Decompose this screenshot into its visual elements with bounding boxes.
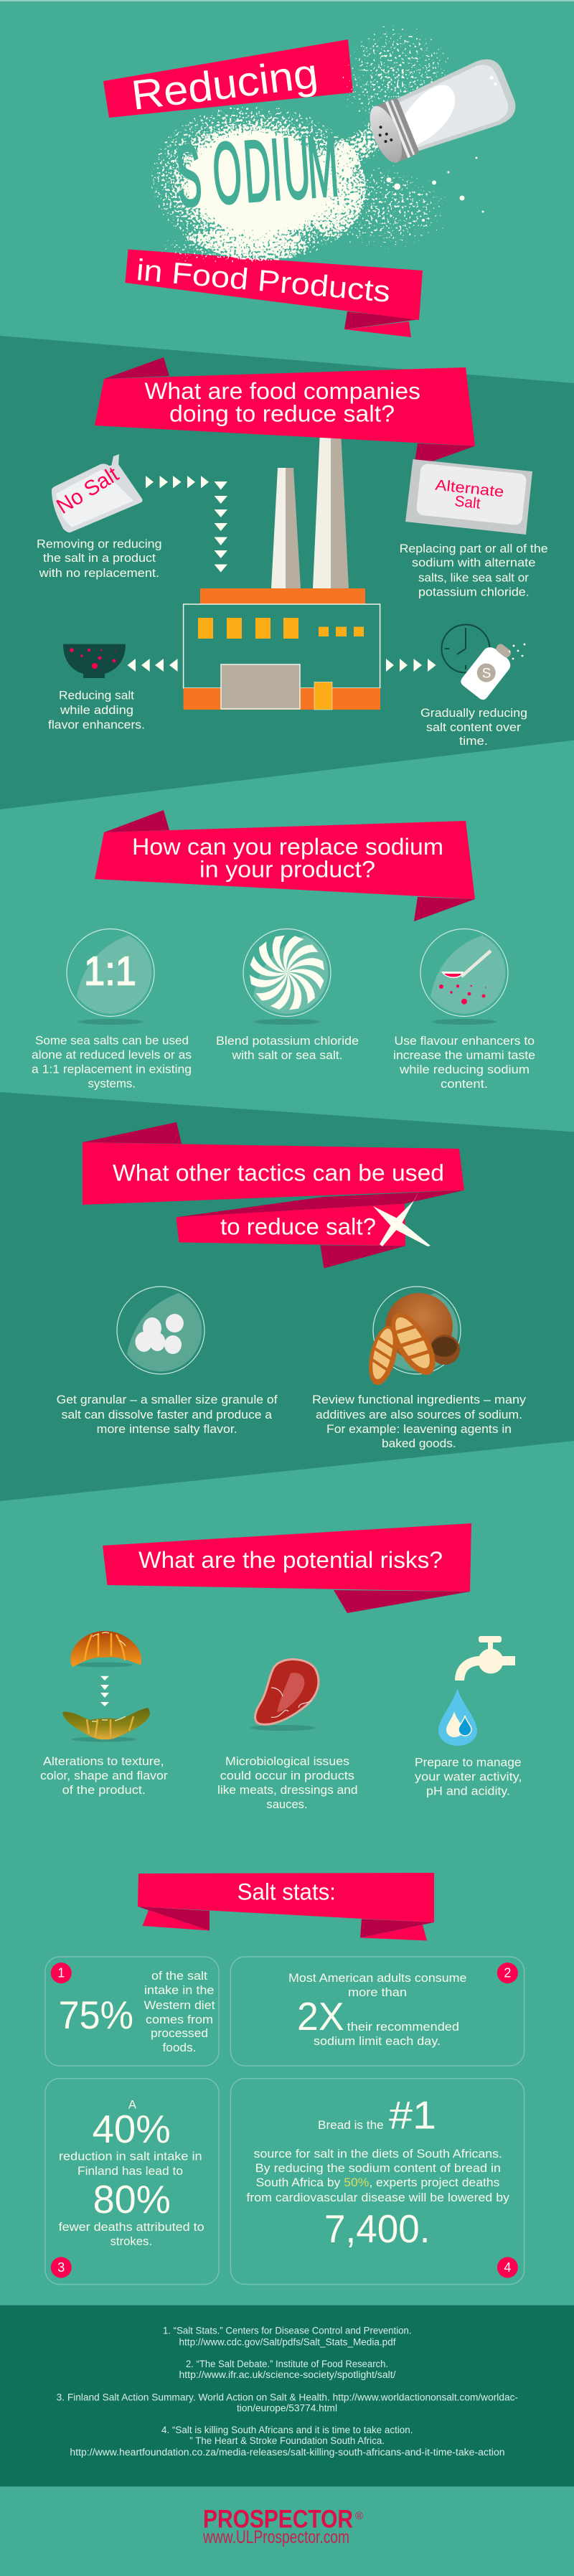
banner heading: how can you replace sodium	[95, 810, 475, 921]
card 2: 2X: their recommended	[347, 2020, 459, 2034]
text: microbiological issues: Microbiological issues	[225, 1754, 349, 1768]
reference 2	[179, 2359, 396, 2380]
icon: bread circle	[364, 1287, 461, 1388]
text: review functional ingredients: additives are also sources of sodium.	[316, 1408, 522, 1421]
banner heading: what other tactics: What other tactics can be used	[113, 1160, 444, 1185]
reference 4: http://www.heartfoundation.co.za/media-releases/salt-killing-south-africans-and-it-time-take-action	[70, 2447, 505, 2458]
card 3: 40 percent and 80 percent: fewer deaths attributed to	[59, 2220, 204, 2234]
reference 2: 2. “The Salt Debate.” Institute of Food Research.	[186, 2359, 388, 2369]
reference 4: 4. “Salt is killing South Africans and it is time to take action.	[161, 2425, 413, 2435]
card 2: 2X: Most American adults consume	[288, 1971, 466, 1985]
card 3: 40 percent and 80 percent	[45, 2079, 219, 2285]
icon: salt granules circle	[117, 1287, 204, 1374]
arrows: factory to bowl	[128, 659, 178, 672]
text: blend potassium chloride: with salt or sea salt.	[231, 1048, 343, 1062]
panel: potential risks	[40, 1523, 522, 1811]
text: microbiological issues	[217, 1754, 357, 1811]
card 4: bread number 1: 7,400.	[324, 2206, 430, 2251]
icon: salt shaker	[362, 54, 521, 170]
card 3: 40 percent and 80 percent: Finland has lead to	[77, 2164, 183, 2178]
card 3: 40 percent and 80 percent: 3	[57, 2260, 65, 2275]
card 1: 75 percent	[45, 1957, 219, 2066]
banner heading: salt stats: Salt stats:	[237, 1879, 336, 1904]
salt splash large grains	[293, 156, 484, 243]
icon: bowl with flavor enhancers	[63, 644, 126, 678]
card 2: 2X: sodium limit each day.	[314, 2034, 441, 2048]
text: some sea salts: a 1:1 replacement in existing	[32, 1063, 192, 1076]
banner heading: what other tactics: to reduce salt?	[220, 1213, 376, 1239]
text: some sea salts: systems.	[88, 1077, 136, 1091]
card 3: 40 percent and 80 percent: 80%	[93, 2177, 171, 2222]
panel: references	[0, 2305, 574, 2486]
text: alterations to texture: of the product.	[62, 1783, 146, 1797]
text: reducing salt while adding: Reducing salt	[59, 688, 134, 702]
icon: clock and salt shaker	[442, 624, 525, 702]
icon: chalk X of salt	[373, 1191, 430, 1246]
text: alterations to texture: Alterations to texture,	[43, 1754, 164, 1768]
banner: in Food Products	[125, 250, 423, 337]
text: review functional ingredients: Review functional ingredients – many	[312, 1393, 527, 1406]
banner heading: what are food companies: doing to reduce salt?	[169, 400, 395, 426]
card 4: bread number 1	[230, 2079, 524, 2285]
text: reducing salt while adding	[48, 688, 145, 731]
text: reducing salt while adding: while adding	[60, 703, 133, 717]
card 4: bread number 1: from cardiovascular disease will be lowered by	[246, 2191, 510, 2204]
card 1: 75 percent: intake in the	[144, 1983, 214, 1997]
text: use flavour enhancers: while reducing sodium	[399, 1063, 530, 1076]
text: replacing part or all: sodium with alternate	[412, 556, 535, 570]
banner heading: potential risks	[103, 1523, 471, 1613]
text: removing or reducing: Removing or reducing	[37, 537, 162, 551]
icon: alternate salt packet: Alternate	[434, 477, 504, 501]
card 1: 75 percent: foods.	[162, 2041, 197, 2054]
text: microbiological issues: could occur in products	[220, 1769, 354, 1782]
text: some sea salts: alone at reduced levels or as	[32, 1048, 192, 1062]
reference 3: tion/europe/53774.html	[237, 2402, 337, 2413]
card 2: 2X: 2X	[297, 1994, 344, 2039]
card 1: 75 percent: of the salt	[151, 1969, 207, 1983]
card 3: 40 percent and 80 percent: strokes.	[110, 2234, 152, 2248]
icon: altered croissant	[62, 1708, 150, 1742]
text: get granular	[57, 1393, 278, 1436]
text: prepare to manage: pH and acidity.	[426, 1785, 510, 1798]
reference 4: ” The Heart & Stroke Foundation South Africa.	[189, 2435, 385, 2446]
text: prepare to manage: Prepare to manage	[415, 1756, 521, 1769]
text: reducing salt while adding: flavor enhancers.	[48, 718, 145, 731]
card 4: bread number 1: By reducing the sodium content of bread in	[255, 2161, 501, 2175]
text: alterations to texture: color, shape and flavor	[40, 1769, 168, 1782]
icon: alternate salt packet: Salt	[453, 493, 481, 512]
icon: factory	[184, 431, 380, 710]
text: use flavour enhancers	[393, 1034, 535, 1091]
icon: alternate salt packet	[405, 459, 532, 535]
logo: Prospector: PROSPECTOR	[203, 2505, 353, 2533]
text: get granular: salt can dissolve faster and produce a	[62, 1408, 273, 1421]
text: replacing part or all: potassium chloride.	[418, 586, 530, 599]
panel: how can you replace sodium	[32, 810, 535, 1091]
banner heading: what are food companies	[95, 357, 475, 468]
text: use flavour enhancers: Use flavour enhancers to	[395, 1034, 535, 1048]
heading: SODIUM: SODIUM	[173, 116, 342, 225]
banner heading: what other tactics	[83, 1122, 464, 1269]
dark band: food companies section	[0, 336, 574, 809]
card 4: bread number 1: South Africa by 50%, experts project deaths	[256, 2176, 499, 2189]
icon: water tap	[455, 1636, 515, 1680]
heading: in Food Products: in Food Products	[135, 253, 392, 309]
text: microbiological issues: sauces.	[266, 1797, 308, 1811]
text: alterations to texture	[40, 1754, 168, 1797]
text: replacing part or all: salts, like sea salt or	[418, 571, 529, 585]
text: some sea salts	[32, 1034, 192, 1091]
icon: no salt pouch: No Salt	[52, 462, 123, 519]
reference 1: 1. “Salt Stats.” Centers for Disease Control and Prevention.	[163, 2326, 412, 2336]
panel: salt stats	[45, 1873, 524, 2285]
text: blend potassium chloride: Blend potassium chloride	[216, 1034, 359, 1048]
icon: no salt pouch	[52, 454, 143, 532]
text: removing or reducing: the salt in a product	[43, 551, 156, 565]
text: replacing part or all	[400, 542, 548, 599]
logo: Prospector: ®	[355, 2510, 363, 2522]
icon: 1:1 circle	[67, 929, 154, 1025]
reference 3	[57, 2392, 518, 2413]
card 1: 75 percent: 75%	[59, 1993, 133, 2037]
card 3: 40 percent and 80 percent: 40%	[93, 2107, 171, 2151]
card 1: 75 percent: processed	[151, 2026, 208, 2040]
text: gradually reducing	[420, 706, 527, 748]
icon: fresh croissant	[70, 1631, 141, 1668]
text: use flavour enhancers: increase the umami taste	[393, 1048, 535, 1062]
icon: swirl circle	[243, 929, 331, 1025]
logo: Prospector: www.ULProspector.com	[202, 2527, 349, 2547]
text: microbiological issues: like meats, dressings and	[217, 1783, 357, 1797]
banner heading: what are food companies: What are food companies	[145, 378, 420, 404]
arrows: croissant change	[100, 1676, 109, 1706]
card 2: 2X: more than	[348, 1985, 407, 1999]
panel: what other tactics	[57, 1122, 527, 1450]
card 3: 40 percent and 80 percent: reduction in salt intake in	[59, 2150, 202, 2163]
arrows: factory to shaker	[386, 659, 436, 672]
reference 4	[70, 2425, 505, 2458]
card 1: 75 percent: Western diet	[144, 1998, 215, 2012]
heading: Reducing: Reducing	[129, 50, 321, 119]
text: gradually reducing: Gradually reducing	[420, 706, 527, 720]
card 1: 75 percent: 1	[57, 1966, 65, 1980]
reference 1: http://www.cdc.gov/Salt/pdfs/Salt_Stats_Media.pdf	[179, 2337, 396, 2348]
icon: spoon circle	[420, 929, 508, 1025]
text: review functional ingredients: For example: leavening agents in	[326, 1422, 512, 1436]
panel: what are food companies doing	[37, 357, 548, 748]
card 4: bread number 1: 4	[504, 2260, 511, 2275]
icon: water drop	[438, 1688, 477, 1746]
icon: 1:1 circle: 1:1	[84, 949, 136, 995]
text: review functional ingredients	[312, 1393, 527, 1450]
title block	[103, 22, 521, 337]
card 2: 2X: 2	[504, 1966, 511, 1980]
text: review functional ingredients: baked goods.	[382, 1437, 456, 1450]
text: use flavour enhancers: content.	[441, 1077, 488, 1091]
banner heading: potential risks: What are the potential risks?	[138, 1547, 443, 1573]
text: prepare to manage	[415, 1756, 522, 1798]
icon: clock and salt shaker: S	[482, 667, 491, 682]
card 2: 2X	[230, 1957, 524, 2066]
card 3: 40 percent and 80 percent: A	[128, 2097, 137, 2111]
banner: Reducing	[103, 39, 353, 118]
text: gradually reducing: time.	[459, 734, 488, 748]
reference 2: http://www.ifr.ac.uk/science-society/spotlight/salt/	[179, 2369, 396, 2380]
text: removing or reducing	[37, 537, 162, 580]
text: replacing part or all: Replacing part or all of the	[400, 542, 548, 555]
text: removing or reducing: with no replacement.	[39, 566, 159, 580]
banner heading: salt stats	[138, 1873, 434, 1940]
dark band: other tactics section	[0, 1092, 574, 1501]
logo: Prospector	[202, 2505, 363, 2547]
text: blend potassium chloride	[216, 1034, 359, 1062]
card 4: bread number 1: Bread is the	[318, 2118, 384, 2132]
card 1: 75 percent: comes from	[146, 2013, 213, 2026]
banner heading: how can you replace sodium: How can you replace sodium	[132, 834, 443, 860]
card 4: bread number 1: #1	[389, 2092, 436, 2137]
icon: meat	[250, 1660, 319, 1731]
reference 1	[163, 2326, 412, 2348]
text: gradually reducing: salt content over	[426, 720, 521, 734]
card 4: bread number 1: source for salt in the diets of South Africans.	[254, 2147, 502, 2161]
text: get granular: more intense salty flavor.	[97, 1422, 237, 1436]
arrows: pouch to factory	[146, 476, 227, 573]
text: some sea salts: Some sea salts can be used	[35, 1034, 189, 1048]
text: get granular: Get granular – a smaller size granule of	[57, 1393, 278, 1406]
salt splash	[144, 22, 459, 270]
reference 3: 3. Finland Salt Action Summary. World Action on Salt & Health. http://www.worldactiononsalt.com/worldac-	[57, 2392, 518, 2402]
text: prepare to manage: your water activity,	[415, 1770, 522, 1784]
banner heading: how can you replace sodium: in your product?	[199, 857, 375, 883]
